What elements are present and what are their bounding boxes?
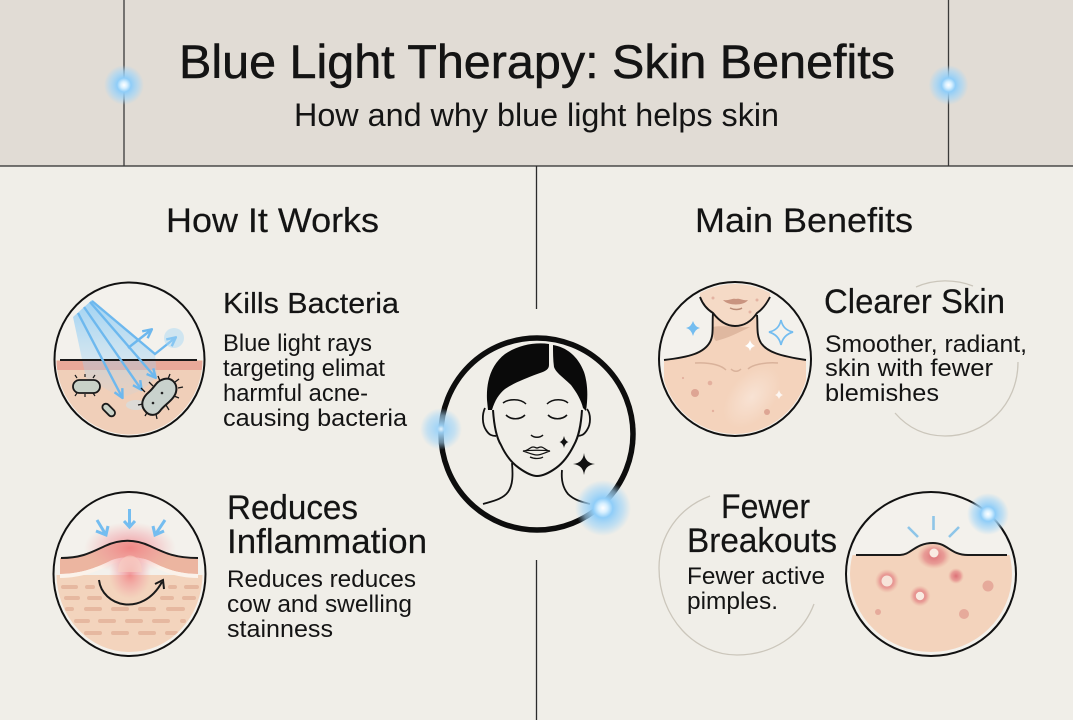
text block: reduces inflammation: Reduces reduces: [227, 566, 416, 593]
text block: kills bacteria: Blue light rays: [223, 330, 372, 357]
brows: [503, 400, 568, 404]
skin layers: [56, 360, 202, 434]
arrows pressing down: [96, 509, 165, 535]
bacteria medium: [73, 374, 100, 397]
neck and shoulders: [483, 463, 513, 504]
text block: clearer skin: Clearer Skin: [824, 283, 1005, 321]
center dividers: [536, 166, 538, 720]
text block: fewer breakouts: Breakouts: [687, 522, 837, 560]
text block: clearer skin: blemishes: [825, 380, 939, 407]
decorative arc: clearer skin: [895, 281, 1018, 436]
jaw and neck lines: [664, 297, 806, 360]
hair left: [487, 343, 549, 410]
icon: central face: [441, 338, 633, 530]
inflammation glow: [84, 522, 176, 574]
icon: header light right: [928, 65, 968, 105]
sparkle white: [745, 340, 755, 351]
subtitle: How and why blue light helps skin: [294, 97, 779, 133]
sparkle small: [560, 436, 568, 448]
text block: fewer breakouts: [687, 488, 837, 615]
lips: [723, 299, 748, 304]
panel: reduces inflammation icon: [50, 492, 210, 665]
icon: face ring glow right: [575, 480, 631, 536]
text block: kills bacteria: harmful acne-: [223, 380, 368, 407]
panel: clearer skin icon: [659, 270, 811, 440]
text block: clearer skin: skin with fewer: [825, 355, 993, 382]
text block: kills bacteria: targeting elimat: [223, 355, 385, 382]
ears: [483, 408, 496, 436]
light beam: [73, 300, 157, 398]
text block: fewer breakouts: Fewer active: [687, 563, 825, 590]
text block: reduces inflammation: stainness: [227, 616, 333, 643]
bacteria small: [101, 402, 116, 418]
sparkle large: [573, 453, 595, 475]
skin body: [850, 544, 1012, 652]
curved arrow: [99, 580, 164, 605]
heading: how it works: How It Works: [166, 202, 379, 240]
panel: fewer breakouts icon: [840, 492, 1020, 660]
text block: kills bacteria: causing bacteria: [223, 405, 408, 432]
text block: reduces inflammation: cow and swelling: [227, 591, 412, 618]
collarbone: [695, 363, 778, 371]
text block: fewer breakouts: Fewer: [721, 488, 810, 526]
nose: [531, 435, 543, 437]
face outline: [493, 410, 582, 476]
text block: reduces inflammation: Reduces: [227, 489, 358, 527]
icon: face ring glow left: [420, 408, 462, 450]
sparkle blue outline: [769, 320, 793, 345]
light rays: [78, 301, 175, 397]
skin surface line: [61, 541, 198, 558]
mouth: [523, 447, 550, 458]
decorative arc: fewer breakouts: [659, 496, 814, 655]
body skin: [664, 313, 806, 440]
text block: kills bacteria: Kills Bacteria: [223, 288, 400, 320]
panel: kills bacteria icon: [50, 282, 210, 440]
pimple dots: [875, 548, 994, 619]
skin surface line: [856, 543, 1007, 555]
skin: [56, 575, 202, 652]
header band: [0, 0, 1073, 166]
text block: kills bacteria: [223, 288, 408, 432]
sparkle blue solid: [686, 321, 700, 336]
icon: header light left: [104, 65, 144, 105]
text block: clearer skin: [824, 283, 1027, 407]
blemishes: [682, 296, 770, 415]
text block: reduces inflammation: Inflammation: [227, 523, 427, 561]
title: Blue Light Therapy: Skin Benefits: [179, 35, 895, 88]
pimple surface glow: [917, 543, 951, 569]
eyes: [506, 415, 567, 419]
bacteria large: [126, 374, 183, 419]
text block: fewer breakouts: pimples.: [687, 588, 778, 615]
icon: breakouts light: [967, 493, 1009, 535]
text block: reduces inflammation: [227, 489, 427, 643]
blue dashes: [908, 516, 959, 537]
tissue dashes: [63, 587, 197, 633]
hair right: [553, 345, 587, 411]
text block: clearer skin: Smoother, radiant,: [825, 331, 1027, 358]
heading: main benefits: Main Benefits: [695, 202, 913, 240]
